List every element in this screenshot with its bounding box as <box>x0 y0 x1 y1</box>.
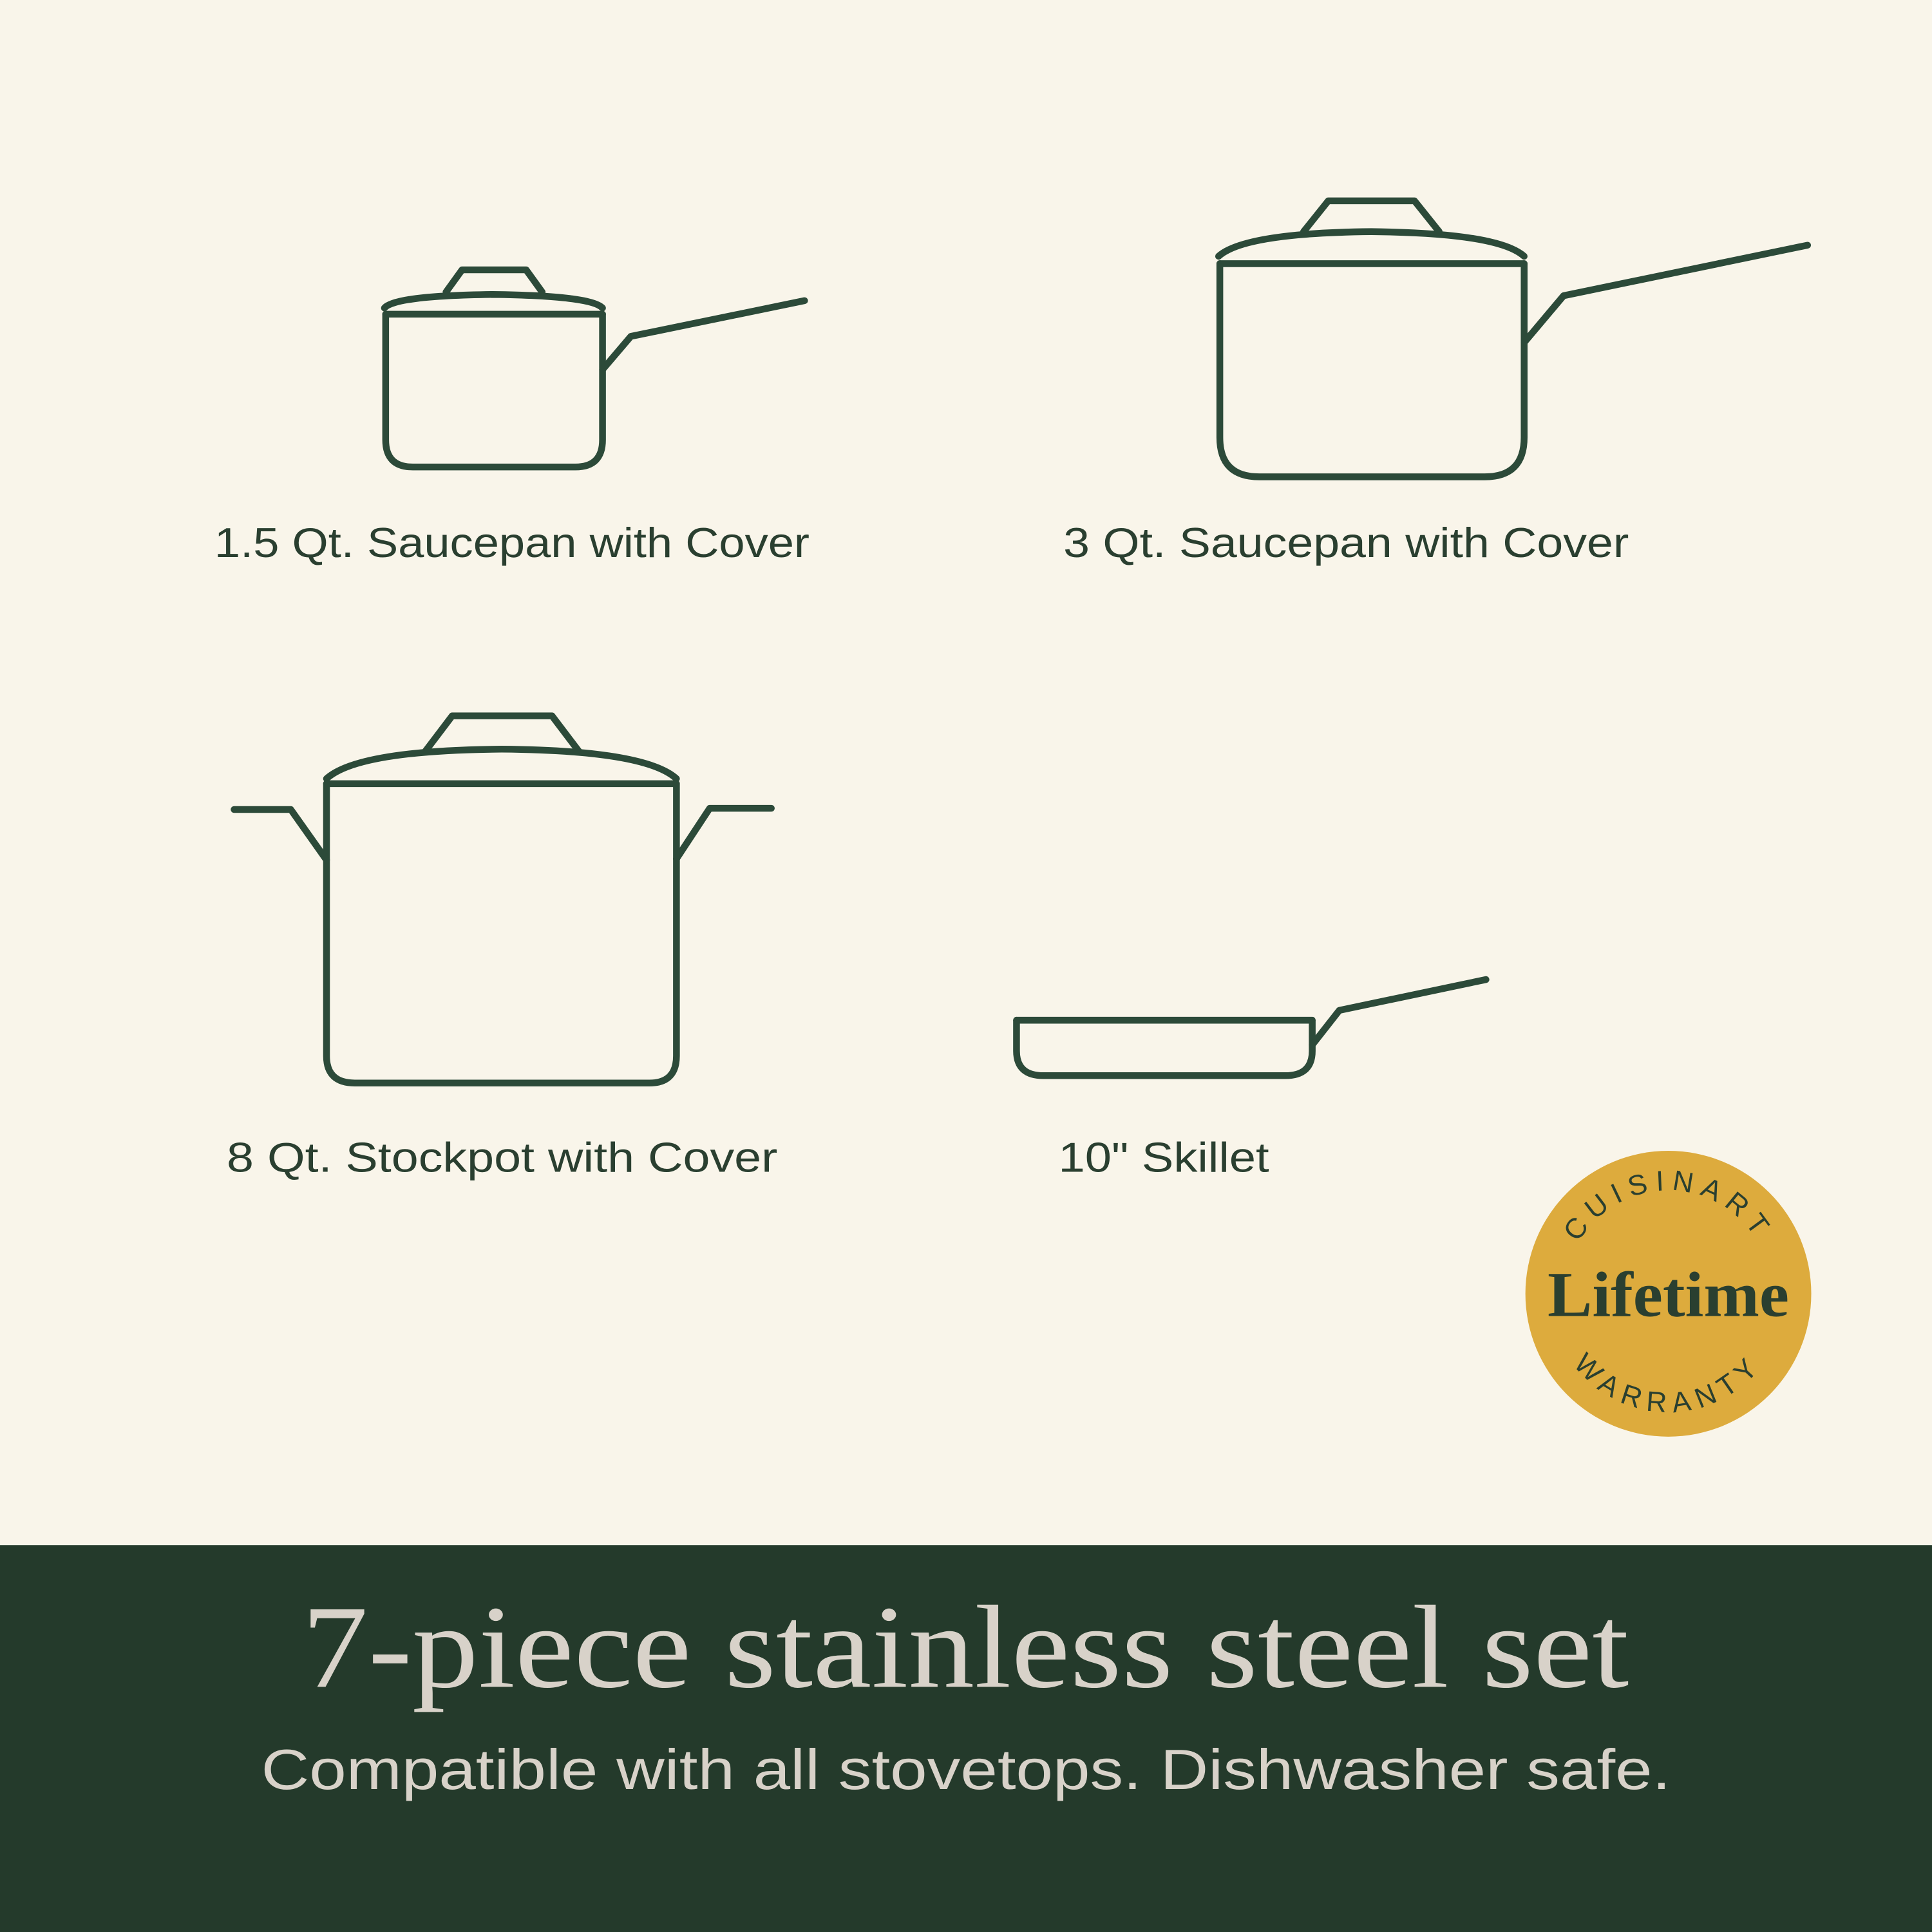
icon: 8 qt stockpot <box>234 716 772 1083</box>
icon: 3 qt saucepan <box>1218 201 1808 477</box>
icon: 1.5 qt saucepan <box>384 270 804 467</box>
subtitle: Compatible with all stovetops. Dishwasher safe. <box>261 1738 1671 1801</box>
title: 7-piece stainless steel set <box>302 1581 1629 1712</box>
icon: skillet <box>1016 980 1486 1075</box>
badge: lifetime warranty: CUISINART <box>1566 1171 1770 1238</box>
label: 1.5 qt: 1.5 Qt. Saucepan with Cover <box>214 519 810 566</box>
footer band <box>0 1545 1932 1932</box>
badge: lifetime warranty <box>1525 1151 1811 1437</box>
badge: lifetime warranty: Lifetime <box>1548 1258 1789 1330</box>
badge: lifetime warranty: WARRANTY <box>1577 1351 1753 1413</box>
label: 3 qt: 3 Qt. Saucepan with Cover <box>1063 519 1629 566</box>
label: 8 qt: 8 Qt. Stockpot with Cover <box>227 1134 777 1181</box>
label: skillet: 10" Skillet <box>1058 1134 1269 1181</box>
